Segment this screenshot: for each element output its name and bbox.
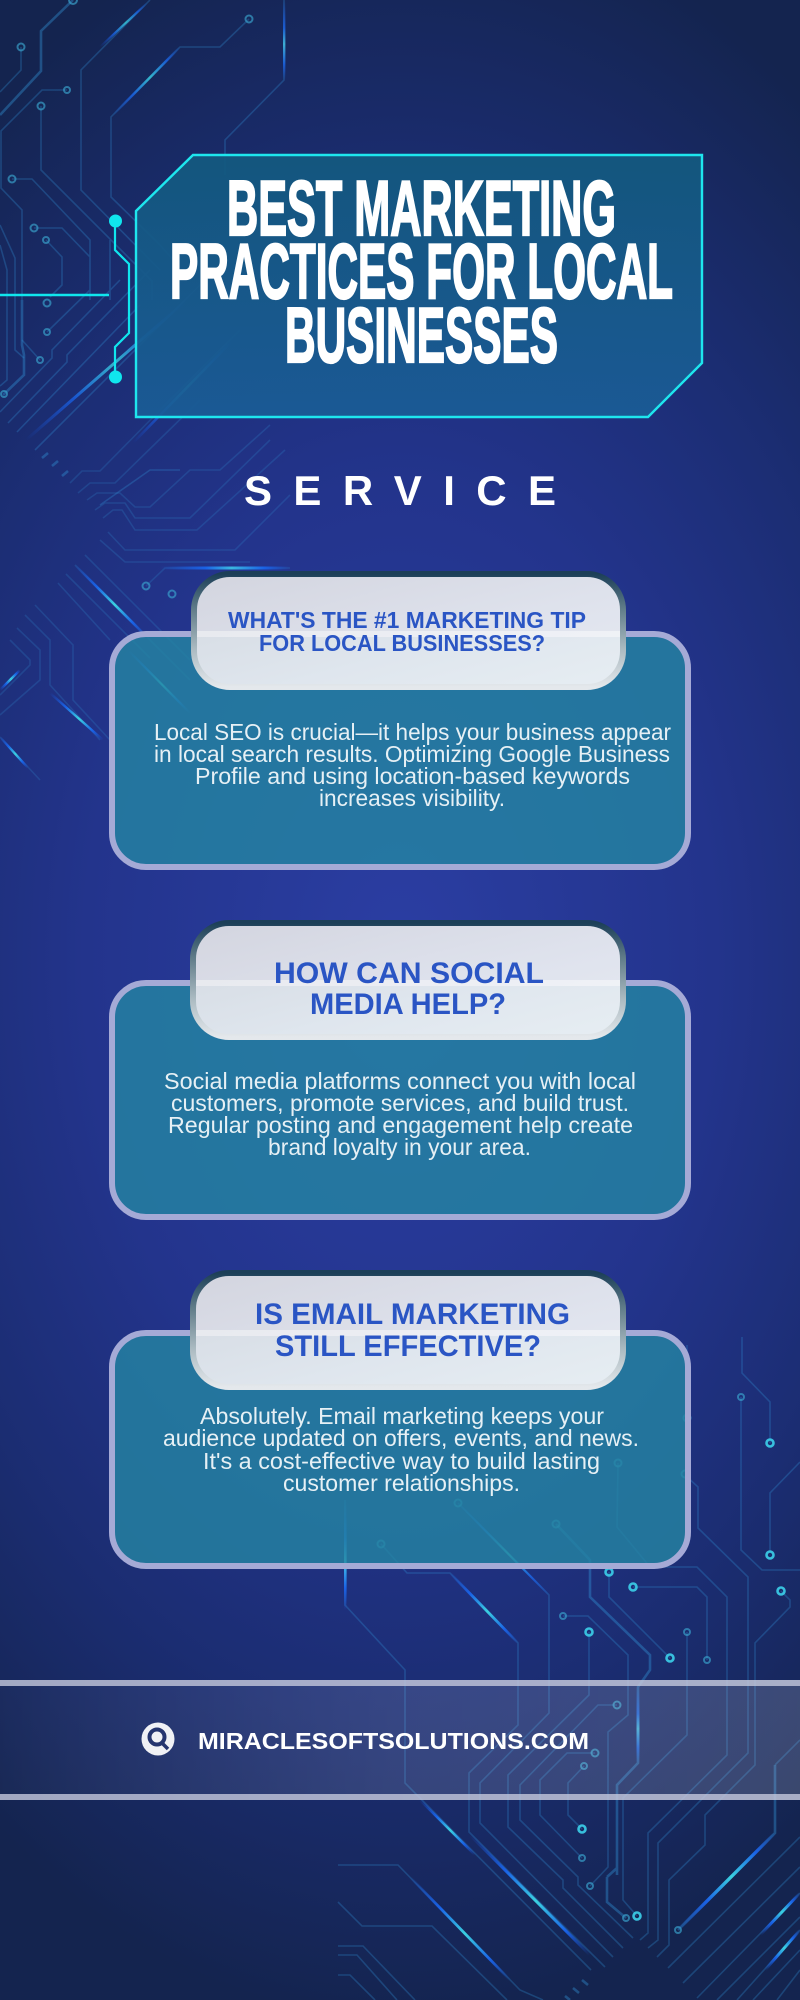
question pill <box>193 923 623 1037</box>
question pill: STILL EFFECTIVE? <box>275 1330 541 1363</box>
answer text: in local search results. Optimizing Google Business <box>154 741 670 767</box>
icon: search magnifier <box>142 1722 174 1756</box>
footer band <box>0 1680 800 1800</box>
answer text: brand loyalty in your area. <box>268 1134 531 1160</box>
answer text <box>163 1403 639 1496</box>
subtitle: service: SERVICE <box>244 467 556 514</box>
panel: marketing tip <box>112 574 688 867</box>
panel: social media <box>112 923 688 1217</box>
answer text: Absolutely. Email marketing keeps your <box>200 1403 604 1429</box>
website url: MIRACLESOFTSOLUTIONS.COM <box>198 1728 589 1754</box>
question pill: HOW CAN SOCIAL <box>274 957 544 990</box>
answer text: increases visibility. <box>319 785 505 811</box>
title panel <box>136 155 702 417</box>
question pill: WHAT'S THE #1 MARKETING TIP <box>228 607 586 633</box>
title heading: BUSINESSES <box>285 291 558 379</box>
answer text: customers, promote services, and build trust. <box>171 1090 629 1116</box>
answer text <box>164 1068 636 1160</box>
title heading <box>170 164 673 379</box>
question pill: IS EMAIL MARKETING <box>255 1298 570 1331</box>
answer text: customer relationships. <box>283 1470 520 1496</box>
answer text: It's a cost-effective way to build lasting <box>203 1448 600 1474</box>
question pill: MEDIA HELP? <box>310 988 506 1021</box>
panel: email marketing <box>112 1273 688 1566</box>
question pill <box>193 1273 623 1387</box>
answer text: Social media platforms connect you with local <box>164 1068 636 1094</box>
answer text <box>154 719 671 811</box>
question pill <box>194 574 623 687</box>
answer text: Local SEO is crucial—it helps your business appear <box>154 719 671 745</box>
connector: cyan circuit bracket with nodes <box>0 214 129 384</box>
answer text: Profile and using location-based keywords <box>195 763 630 789</box>
answer text: audience updated on offers, events, and news. <box>163 1425 639 1451</box>
question pill: FOR LOCAL BUSINESSES? <box>259 630 545 656</box>
answer text: Regular posting and engagement help create <box>168 1112 633 1138</box>
